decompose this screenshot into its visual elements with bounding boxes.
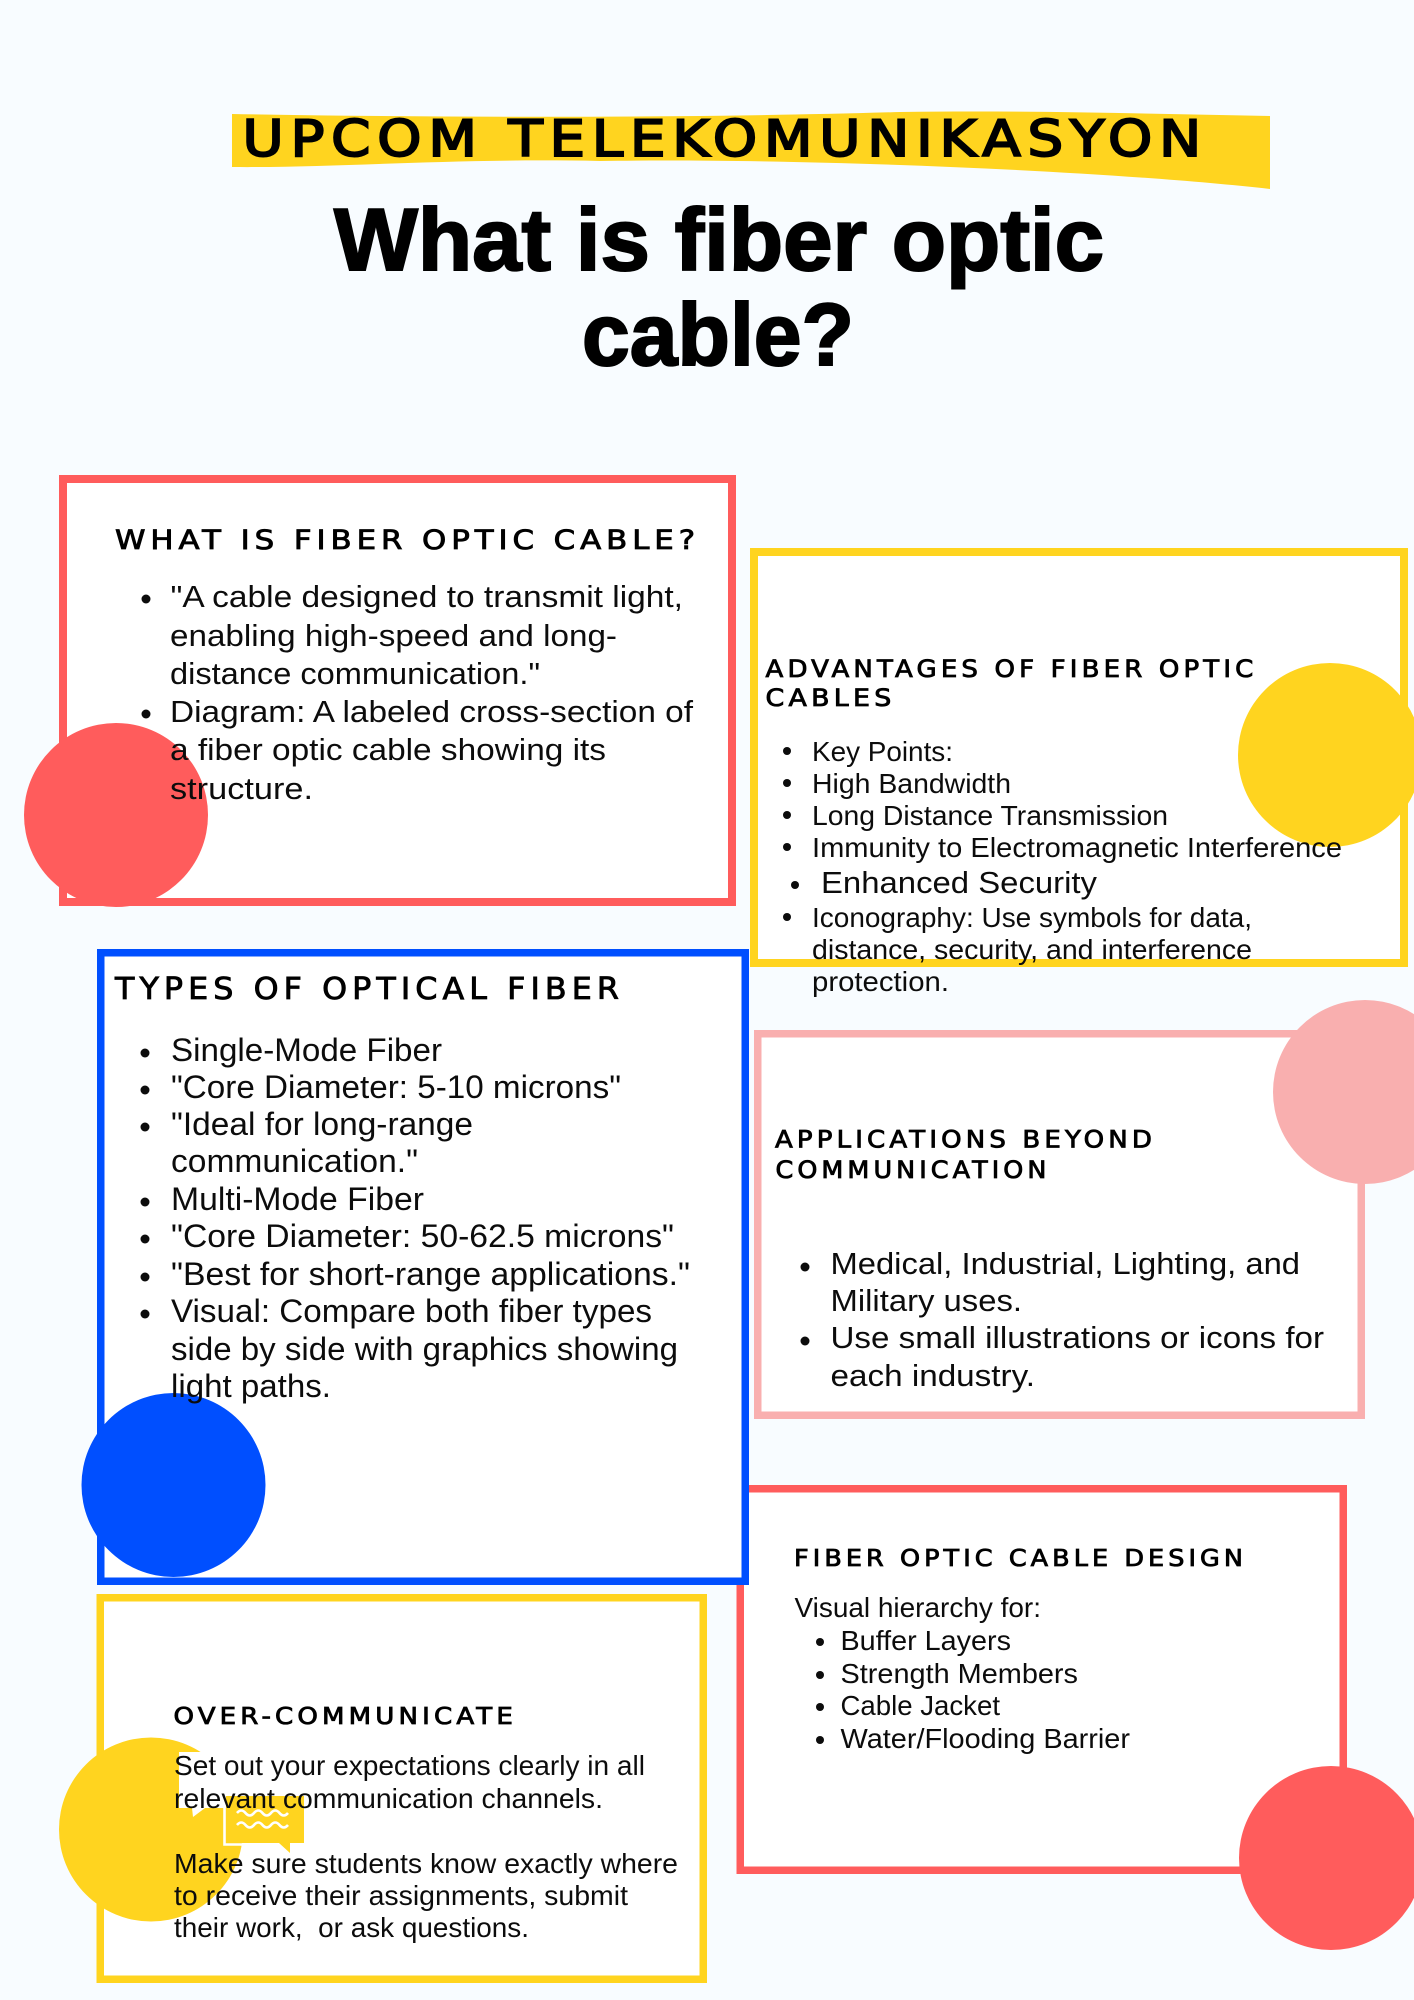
panel: applications beyond communication (758, 1000, 1414, 1415)
heading: OVER-COMMUNICATE (174, 1702, 517, 1730)
decorative pink circle (1273, 1000, 1414, 1184)
body list: Strength Members (840, 1658, 1078, 1689)
bullet list: "Best for short-range applications." (171, 1256, 690, 1292)
panel: fiber optic cable design (740, 1489, 1414, 1950)
bullet list: High Bandwidth (812, 768, 1011, 799)
body text: to receive their assignments, submit (174, 1880, 628, 1911)
bullet list: enabling high-speed and long- (170, 618, 617, 653)
bullet list: Long Distance Transmission (812, 800, 1168, 831)
bullet list: "Ideal for long-range (171, 1106, 473, 1142)
heading: CABLES (766, 684, 896, 712)
body list: Buffer Layers (840, 1625, 1011, 1656)
body text: Make sure students know exactly where (174, 1848, 678, 1879)
bullet list: communication." (171, 1143, 418, 1179)
bullet list: Medical, Industrial, Lighting, and (830, 1246, 1300, 1281)
yellow brush highlight (232, 111, 1270, 189)
bullet list: Multi-Mode Fiber (171, 1181, 424, 1217)
body text: relevant communication channels. (174, 1783, 603, 1814)
bullet list: Single-Mode Fiber (171, 1032, 442, 1068)
heading: WHAT IS FIBER OPTIC CABLE? (115, 525, 700, 556)
bullet list: Iconography: Use symbols for data, (812, 902, 1252, 933)
heading (766, 655, 1258, 712)
bullet list: Key Points: (812, 736, 953, 767)
heading: COMMUNICATION (776, 1156, 1050, 1184)
bullet list (783, 736, 1342, 997)
heading (775, 1126, 1156, 1184)
decorative yellow circle (1238, 663, 1414, 847)
bullet list: "Core Diameter: 5-10 microns" (171, 1069, 621, 1105)
bullet list (140, 1032, 690, 1404)
decorative blue circle (82, 1393, 266, 1577)
decorative red circle (24, 723, 208, 907)
title: What is fiber optic (334, 190, 1104, 289)
heading: FIBER OPTIC CABLE DESIGN (794, 1544, 1247, 1572)
heading: ADVANTAGES OF FIBER OPTIC (766, 655, 1258, 683)
body text: Set out your expectations clearly in all (174, 1750, 645, 1781)
bullet list: Diagram: A labeled cross-section of (170, 694, 693, 729)
bullet list: distance, security, and interference (812, 934, 1252, 965)
bullet list: protection. (812, 966, 949, 997)
body text (174, 1750, 678, 1943)
banner text: UPCOM TELEKOMUNIKASYON (242, 110, 1208, 168)
bullet list: distance communication." (170, 656, 540, 691)
body list (794, 1592, 1130, 1754)
panel: what is fiber optic cable (24, 479, 732, 907)
bullet list: each industry. (830, 1358, 1035, 1393)
bullet list: "Core Diameter: 50-62.5 microns" (171, 1218, 674, 1254)
panel: over-communicate (59, 1598, 703, 1979)
bullet list: side by side with graphics showing (171, 1331, 678, 1367)
decorative yellow circle (59, 1738, 243, 1922)
heading: TYPES OF OPTICAL FIBER (114, 972, 624, 1007)
bullet list: a fiber optic cable showing its (170, 732, 606, 767)
body list: Visual hierarchy for: (794, 1592, 1041, 1623)
bullet list: Use small illustrations or icons for (830, 1320, 1324, 1355)
bullet list: Visual: Compare both fiber types (171, 1293, 652, 1329)
bullet list: "A cable designed to transmit light, (170, 579, 683, 614)
panel: advantages of fiber optic cables (754, 552, 1414, 997)
body list: Cable Jacket (840, 1690, 1000, 1721)
bullet list: Immunity to Electromagnetic Interference (812, 832, 1342, 863)
title: cable? (582, 285, 854, 384)
body text: their work, or ask questions. (174, 1912, 529, 1943)
title (334, 190, 1104, 384)
bullet list (800, 1246, 1324, 1393)
bullet list: Military uses. (830, 1283, 1022, 1318)
decorative red circle (1239, 1766, 1414, 1950)
bullet list: light paths. (171, 1368, 331, 1404)
icon: chat bubbles (179, 1752, 304, 1853)
title banner (232, 110, 1270, 189)
bullet list: Enhanced Security (821, 865, 1098, 900)
bullet list (142, 579, 693, 806)
panel: types of optical fiber (82, 953, 745, 1581)
heading: APPLICATIONS BEYOND (775, 1126, 1156, 1154)
bullet list: structure. (170, 771, 313, 806)
body list: Water/Flooding Barrier (840, 1723, 1130, 1754)
